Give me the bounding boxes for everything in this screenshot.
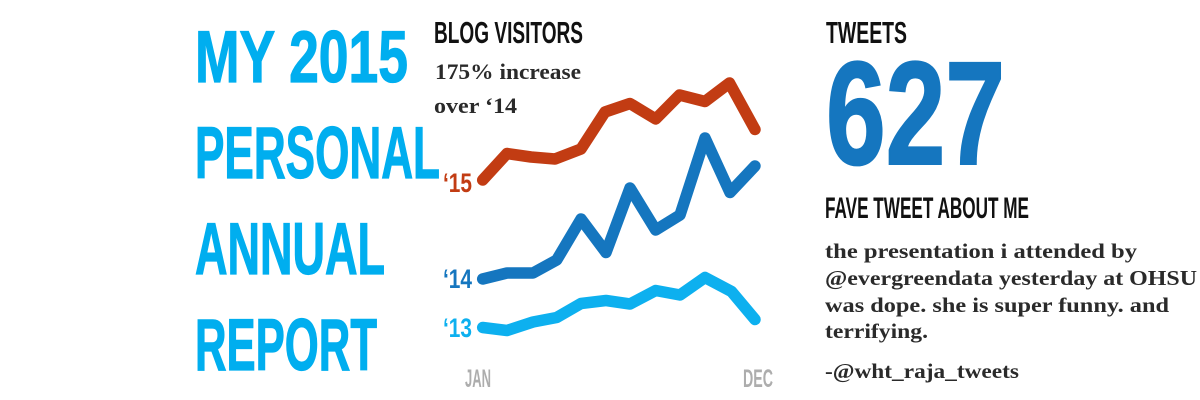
text block: quoted tweet: the presentation i attended by	[825, 239, 1138, 263]
title: my 2015 personal annual report: ANNUAL	[195, 209, 385, 290]
series labels: ‘14	[443, 264, 472, 294]
text block: increase note: 175% increase	[435, 59, 581, 84]
title: my 2015 personal annual report: REPORT	[195, 305, 377, 386]
text block: increase note	[434, 59, 581, 118]
series labels	[443, 168, 472, 343]
text block: increase note: over ‘14	[434, 93, 517, 118]
big number: 627 tweets: 627	[826, 32, 1005, 196]
text block: quoted tweet: @evergreendata yesterday at OHSU	[825, 266, 1197, 290]
title: my 2015 personal annual report: PERSONAL	[195, 113, 440, 194]
line: 2015	[483, 83, 755, 180]
title: my 2015 personal annual report	[195, 17, 440, 386]
heading: fave tweet about me: FAVE TWEET ABOUT ME	[825, 192, 1029, 225]
text block: quoted tweet: terrifying.	[825, 319, 928, 343]
line: 2013	[483, 278, 755, 330]
text block: quoted tweet: -@wht_raja_tweets	[825, 359, 1019, 383]
line: 2014	[483, 138, 755, 279]
axis labels: DEC	[743, 365, 773, 393]
heading: blog visitors: BLOG VISITORS	[434, 15, 583, 50]
title: my 2015 personal annual report: MY 2015	[195, 17, 408, 98]
heading: tweets: TWEETS	[826, 15, 907, 50]
axis labels	[465, 365, 773, 393]
series labels: ‘13	[443, 313, 472, 343]
axis labels: JAN	[465, 365, 491, 393]
text block: quoted tweet: was dope. she is super funny. and	[825, 293, 1169, 317]
series labels: ‘15	[443, 168, 472, 198]
line chart: blog visitors by year	[483, 83, 755, 330]
text block: quoted tweet	[825, 239, 1197, 383]
